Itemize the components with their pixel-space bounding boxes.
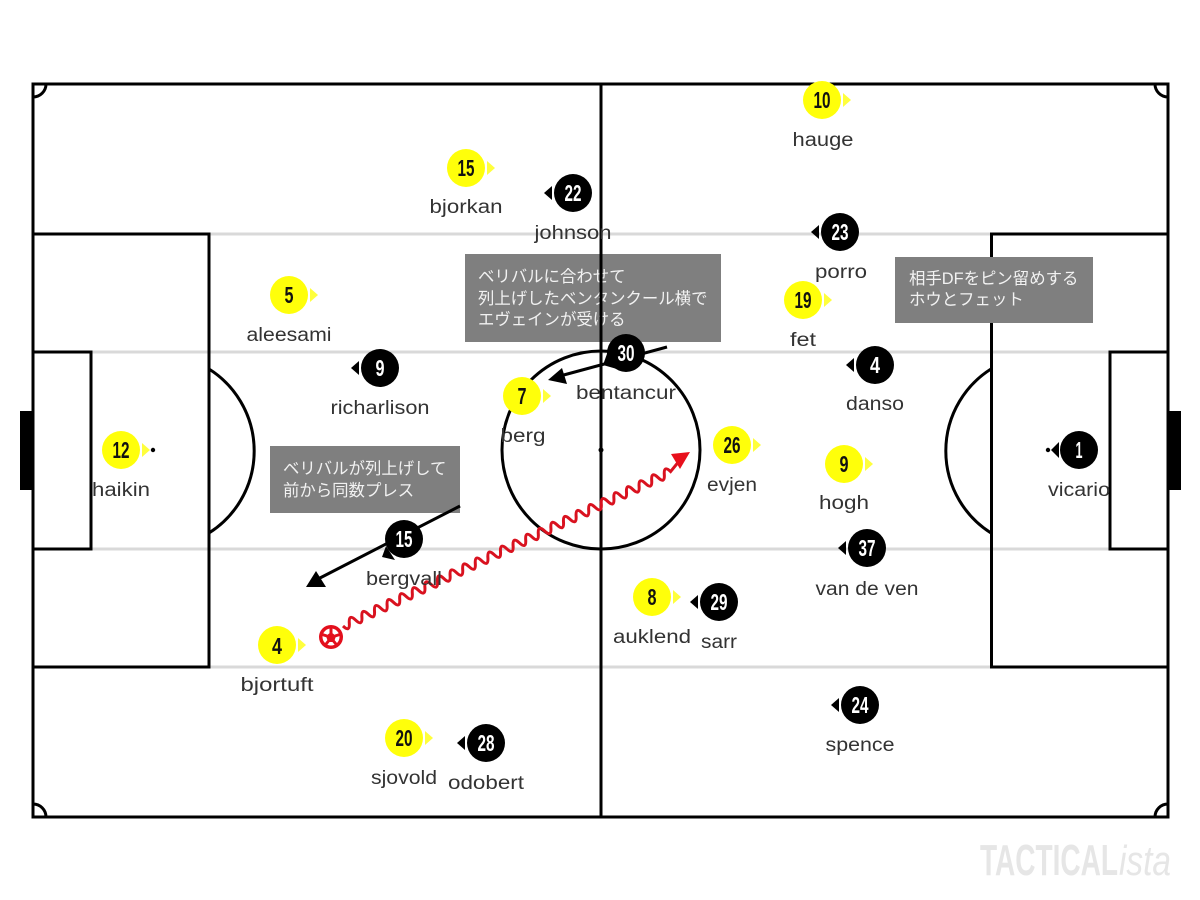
player: fet 19: fet <box>790 330 817 351</box>
pitch grey zone lines <box>91 234 1110 667</box>
player: odobert 28: 28 <box>478 730 495 756</box>
player: bjorkan 15: 15 <box>458 155 475 181</box>
player: hogh 9: hogh <box>819 493 869 514</box>
player: danso 4 <box>846 346 904 415</box>
player: bentancur 30: bentancur <box>576 383 677 404</box>
player: sjovold 20: 20 <box>396 725 412 751</box>
pitch markings <box>33 84 1168 817</box>
player: hogh 9 <box>819 445 873 514</box>
player: bjortuft 4 <box>240 626 314 696</box>
centre spot <box>598 448 604 452</box>
player: bentancur 30 <box>576 334 677 404</box>
player: johnson 22: 22 <box>564 180 582 206</box>
player: spence 24 <box>826 686 894 756</box>
icon: ball <box>319 625 343 649</box>
player: porro 23 <box>811 213 867 283</box>
player: berg 7: berg <box>500 426 546 447</box>
player: spence 24: 24 <box>852 692 869 718</box>
player: vicario 1: vicario <box>1048 480 1110 501</box>
callout: Bentancur side <box>465 254 721 342</box>
arrow: Bergvall press run <box>306 506 460 587</box>
callout: Bentancur side: ベリバルに合わせて <box>478 268 626 286</box>
player: odobert 28 <box>448 724 525 794</box>
player: vicario 1: 1 <box>1076 437 1083 463</box>
callout: Bergvall press: ベリバルが列上げして <box>283 460 446 478</box>
watermark: ista <box>1119 837 1171 884</box>
player: bjortuft 4: bjortuft <box>240 675 314 696</box>
player: sjovold 20 <box>371 719 437 789</box>
player: bentancur 30: 30 <box>618 340 634 366</box>
callout: Haugesund pin <box>895 257 1093 323</box>
player: hogh 9: 9 <box>840 451 848 477</box>
player: richarlison 9: 9 <box>376 355 384 381</box>
player: bergvall 15 <box>366 520 442 590</box>
player: sjovold 20: sjovold <box>371 768 437 789</box>
callout: Haugesund pin: ホウとフェット <box>909 291 1024 309</box>
player: bergvall 15: bergvall <box>366 569 442 590</box>
player: sarr 29: sarr <box>701 632 738 653</box>
player: fet 19 <box>784 281 832 351</box>
player: auklend 8: 8 <box>648 584 657 610</box>
player: aleesami 5: 5 <box>284 282 294 308</box>
player: berg 7: 7 <box>518 383 526 409</box>
player: johnson 22 <box>533 174 612 244</box>
player: spence 24: spence <box>826 735 894 756</box>
player: aleesami 5: aleesami <box>246 325 332 346</box>
player: bjorkan 15: bjorkan <box>430 197 502 218</box>
player: bergvall 15: 15 <box>396 526 413 552</box>
player: fet 19: 19 <box>794 287 812 313</box>
callout: Bentancur side: 列上げしたベンタンクール横で <box>478 290 707 308</box>
player: sarr 29 <box>690 583 738 653</box>
player: sarr 29: 29 <box>710 589 728 615</box>
arrow: Bentancur run <box>548 347 667 384</box>
player: auklend 8: auklend <box>613 627 691 648</box>
player: van de ven 37: van de ven <box>816 579 918 600</box>
player: odobert 28: odobert <box>448 773 525 794</box>
callout: Bergvall press <box>270 446 460 513</box>
right goal <box>1168 411 1181 490</box>
callout: Bentancur side: エヴェインが受ける <box>478 311 626 329</box>
player: van de ven 37: 37 <box>858 535 876 561</box>
player: berg 7 <box>500 377 551 447</box>
player: bjorkan 15 <box>430 149 502 218</box>
player: aleesami 5 <box>246 276 332 346</box>
player: danso 4: danso <box>846 394 904 415</box>
player: haikin 12: 12 <box>112 437 130 463</box>
player: haikin 12: haikin <box>92 480 150 501</box>
left goal <box>20 411 33 490</box>
arrow: red wavy pass <box>343 452 690 629</box>
watermark: TACTICAL <box>980 836 1118 885</box>
callout: Bergvall press: 前から同数プレス <box>283 482 414 500</box>
player: evjen 26: 26 <box>724 432 740 458</box>
player: danso 4: 4 <box>870 352 880 378</box>
player: haikin 12 <box>92 431 155 501</box>
player: hauge 10 <box>792 81 854 151</box>
player: bjortuft 4: 4 <box>272 633 282 659</box>
player: porro 23: 23 <box>832 219 848 245</box>
callout: Haugesund pin: 相手DFをピン留めする <box>909 270 1078 288</box>
player: hauge 10: hauge <box>792 130 854 151</box>
player: richarlison 9: richarlison <box>330 398 430 419</box>
player: evjen 26 <box>707 426 761 496</box>
player: van de ven 37 <box>816 529 918 600</box>
player: johnson 22: johnson <box>533 223 612 244</box>
player: hauge 10: 10 <box>814 87 830 113</box>
player: porro 23: porro <box>815 262 867 283</box>
player: richarlison 9 <box>330 349 430 419</box>
player: evjen 26: evjen <box>707 475 757 496</box>
player: auklend 8 <box>613 578 691 648</box>
player: vicario 1 <box>1046 431 1110 501</box>
